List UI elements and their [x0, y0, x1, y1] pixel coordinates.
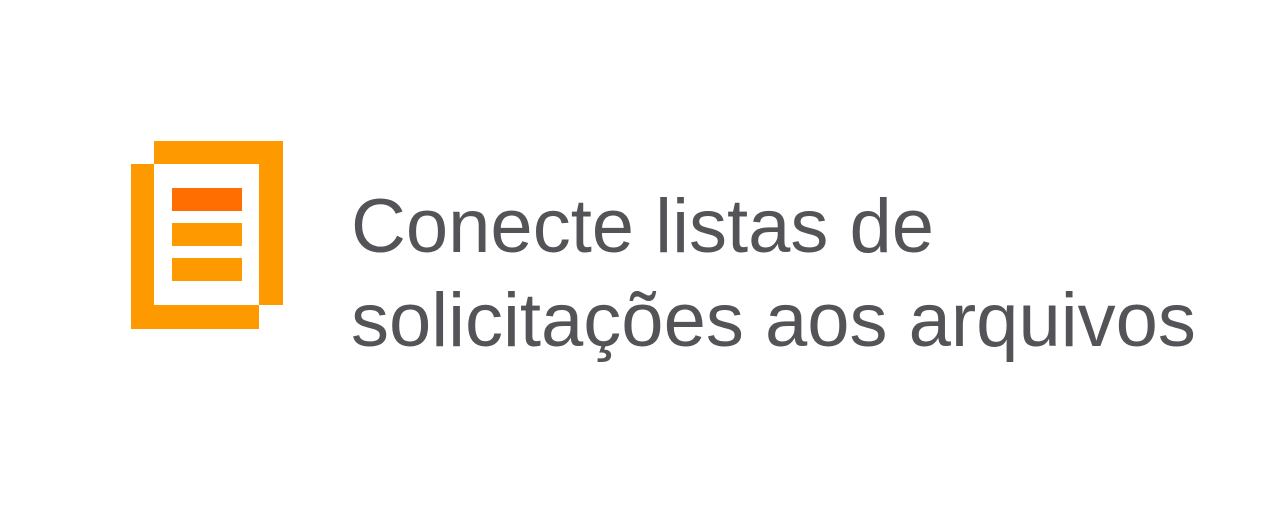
bar 1 highlighted	[172, 188, 242, 211]
bar 3	[172, 258, 242, 281]
page inner white	[154, 164, 259, 305]
heading text	[351, 184, 1196, 363]
bar 2	[172, 223, 242, 246]
heading text: solicitações aos arquivos	[351, 278, 1196, 363]
front page	[131, 164, 259, 329]
back page	[154, 141, 283, 305]
icon: document list	[131, 141, 283, 329]
heading text: Conecte listas de	[351, 184, 934, 269]
